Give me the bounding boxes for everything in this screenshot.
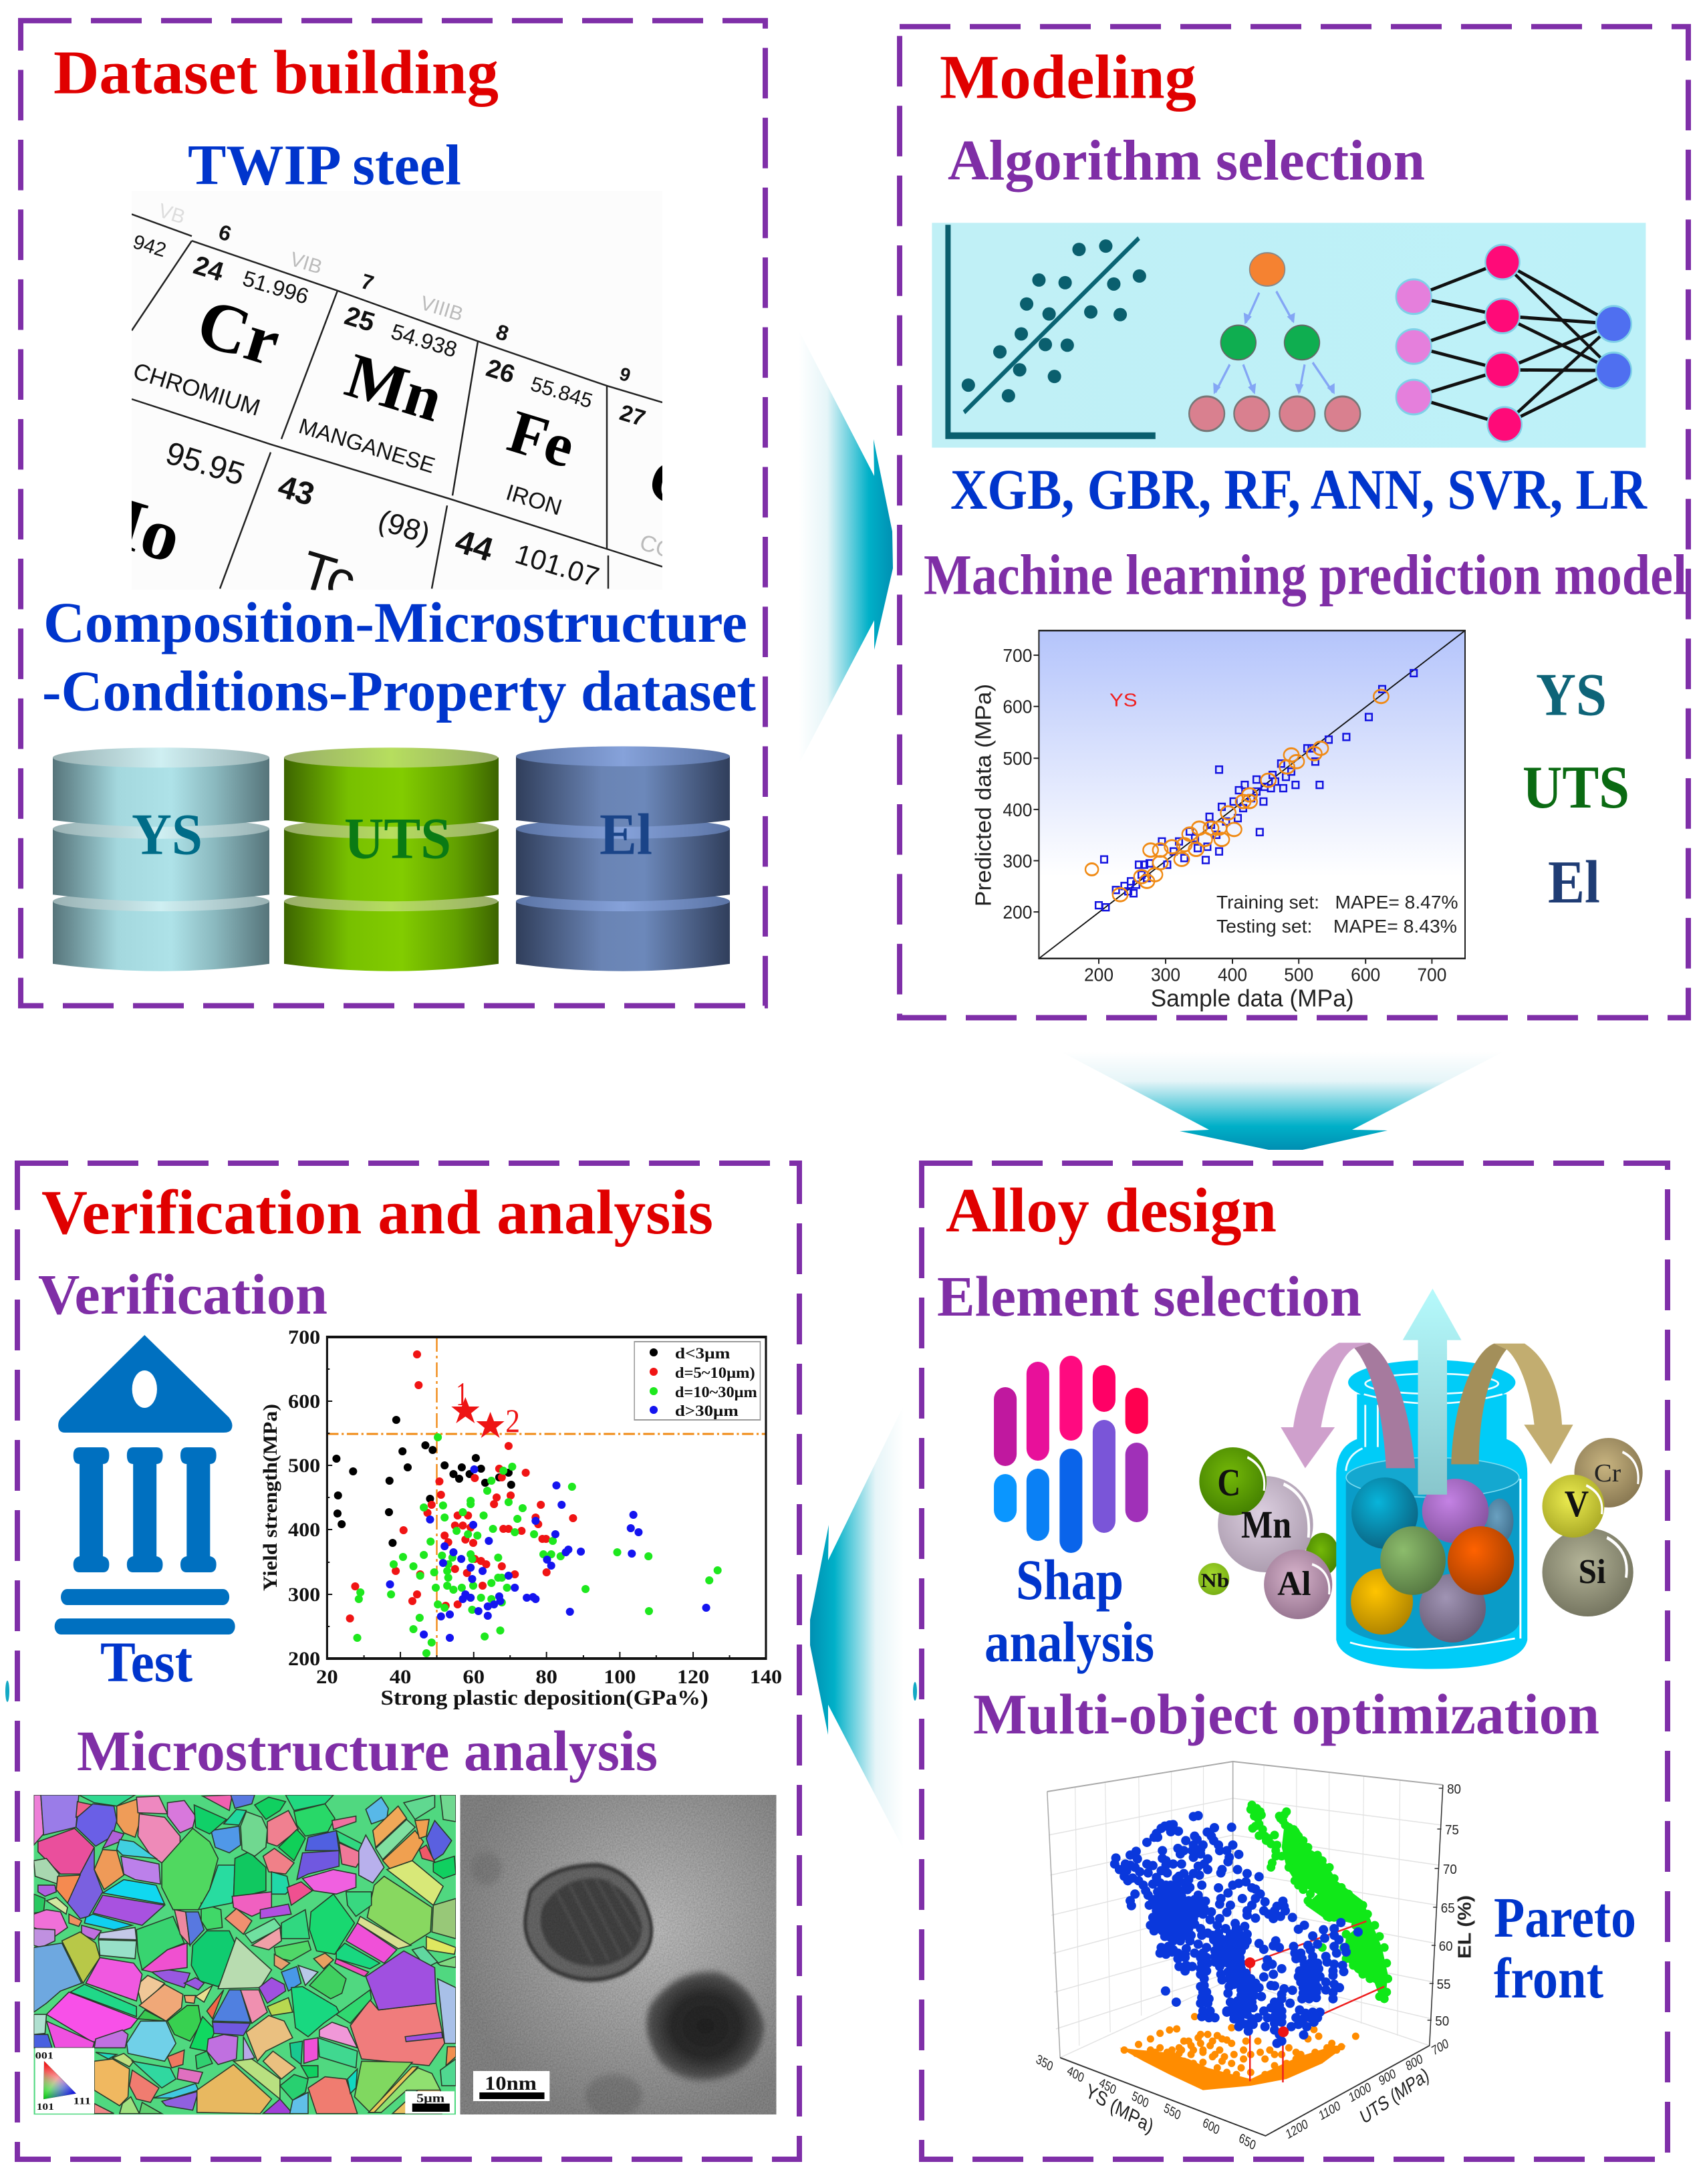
heading: dataset building: Dataset building [53,38,499,107]
chart: 3D Pareto front: 75 [1445,1822,1459,1837]
subheading: element selection: Element selection [937,1264,1361,1328]
chart: predicted vs sample data: 600 [1351,965,1380,985]
label: pareto front: front [1494,1946,1603,2010]
panel frame [17,1163,799,2159]
chart: 3D Pareto front: 350 [1035,2052,1055,2074]
label: shap analysis: analysis [984,1610,1154,1674]
marker: star 1 [451,1397,479,1423]
chart: predicted vs sample data: YS [1109,690,1138,711]
database: YS: YS [132,802,203,867]
illustration: element bottle [1281,1289,1573,1669]
chart: 3D Pareto front [1035,1762,1475,2153]
spheres [1351,1477,1418,1549]
label: shap analysis: Shap [1016,1548,1124,1612]
chart: yield strength vs strong plastic deposition [260,1326,782,1710]
chart: yield strength vs strong plastic deposition: 500 [288,1454,320,1477]
image: periodic table: Mo [65,470,191,578]
text: conditions-property dataset: -Conditions-Property dataset [42,660,756,723]
scale bar: 5 micrometres: 5μm [416,2091,445,2105]
subheading: algorithm selection: Algorithm selection [948,129,1425,193]
chart: predicted vs sample data: 400 [1003,800,1032,820]
chart: predicted vs sample data: 200 [1003,902,1032,923]
icon: linear regression [948,225,1156,436]
panel: alloy design [913,1163,1668,2159]
chart: yield strength vs strong plastic deposition: 20 [316,1665,338,1688]
orange floor projection [1120,2017,1355,2090]
database: UTS [284,747,499,971]
database: El [516,746,730,971]
chart: 3D Pareto front: 600 [1201,2115,1221,2138]
chart: predicted vs sample data [971,630,1465,1011]
text: composition-microstructure: Composition-Microstructure [43,591,747,654]
chart: 3D Pareto front: UTS (MPa) [1357,2063,1432,2129]
database: YS [53,747,269,971]
image: periodic table: VIB [287,248,325,279]
panel: verification and analysis [5,1163,799,2159]
label: YS: YS [1536,660,1607,729]
image: periodic table: 8 [493,320,512,346]
chart: 3D Pareto front: 500 [1130,2088,1150,2111]
image: periodic table: 25 [341,301,378,338]
chart: 3D Pareto front: 650 [1237,2131,1258,2153]
chart: yield strength vs strong plastic deposition: 120 [677,1665,709,1688]
legend: inverse pole figure: 001 [35,2050,53,2061]
illustration: element spheres: C [1217,1462,1240,1504]
icon: test institution [55,1335,235,1634]
chart: yield strength vs strong plastic deposition: 200 [288,1647,320,1670]
chart: predicted vs sample data: 700 [1417,965,1446,985]
icon: decision tree [1189,253,1360,431]
image: periodic table: Cr [188,285,289,381]
image: periodic table: Tc [294,539,363,612]
chart: predicted vs sample data: 300 [1003,851,1032,872]
panel: modeling [900,27,1688,1017]
chart: yield strength vs strong plastic deposition: d<3μm [675,1346,730,1362]
chart: yield strength vs strong plastic deposition: 100 [604,1665,636,1688]
scale bar: 10 nm [473,2071,549,2101]
chart: predicted vs sample data: 500 [1003,749,1032,769]
chart: predicted vs sample data: Sample data (MPa) [1151,985,1354,1011]
image: periodic table: 44 [451,522,498,569]
chart: yield strength vs strong plastic deposition: 600 [288,1390,320,1413]
chart: yield strength vs strong plastic deposition: 1 [456,1375,468,1413]
label: shap analysis [984,1548,1154,1674]
chart: predicted vs sample data: 600 [1003,697,1032,717]
chart: yield strength vs strong plastic deposition: Strong plastic deposition(GPa%) [380,1686,708,1710]
heading: verification and analysis: Verification and analysis [41,1178,713,1247]
image: periodic table: Mn [338,340,451,435]
tick labels: 80 [1447,1782,1461,1796]
chart: 3D Pareto front: 900 [1377,2066,1398,2088]
image: periodic table: 51.996 [240,265,311,309]
marker: star 2 [477,1412,505,1438]
chart: yield strength vs strong plastic deposition: 2 [505,1402,520,1439]
legend: inverse pole figure [35,2048,94,2114]
chart: yield strength vs strong plastic deposition: 300 [288,1583,320,1606]
chart: 3D Pareto front: 700 [1430,2036,1450,2058]
legend: inverse pole figure: 111 [73,2095,91,2106]
red optimal points [1250,1963,1283,2032]
arrow: up through bottle [1403,1289,1462,1495]
image: periodic table: 55.845 [528,372,596,412]
artifact: teal sliver [913,1682,917,1701]
image: periodic table: 6 [216,220,235,246]
chart: 3D Pareto front: 1000 [1347,2080,1373,2105]
illustration: element spheres: Al [1277,1565,1311,1603]
label: test: Test [100,1630,192,1694]
chart: 3D Pareto front: 1200 [1284,2116,1310,2142]
chart: yield strength vs strong plastic deposition: 60 [463,1665,485,1688]
arrow: dataset building to modeling [797,326,893,768]
label: pareto front: Pareto [1494,1885,1636,1949]
panel frame [922,1163,1668,2159]
panel frame [21,21,765,1005]
bottle body [1336,1394,1527,1669]
arrow: alloy design to verification [810,1404,904,1851]
image: periodic table: Fe [501,396,583,481]
artifact: teal sliver [5,1681,9,1702]
arrow: out to left elements [1281,1343,1369,1468]
chart: yield strength vs strong plastic deposition: d>30μm [675,1403,739,1420]
arrow: out to right elements [1494,1344,1573,1464]
image: periodic table: 43 [274,469,318,513]
legend: inverse pole figure: 101 [37,2101,54,2112]
chart: predicted vs sample data: 400 [1218,965,1247,985]
image: periodic table: 27 [617,400,648,431]
chart: 3D Pareto front: 800 [1404,2051,1424,2074]
image: periodic table: 24 [190,251,227,287]
chart: predicted vs sample data: 700 [1003,646,1032,666]
label: UTS: UTS [1523,753,1629,821]
heading: alloy design: Alloy design [946,1176,1277,1245]
red guide lines [1249,1921,1384,2082]
image: periodic table: C [641,445,702,521]
label: pareto front [1494,1885,1636,2010]
image: periodic table: VB [156,200,188,229]
chart: predicted vs sample data: Predicted data (MPa) [971,684,996,906]
panel frame [900,27,1688,1017]
data points [1115,1805,1388,2090]
chart: yield strength vs strong plastic deposition: Yield strength(MPa) [260,1404,281,1591]
image: periodic table: 7 [358,269,377,295]
label: El: El [1548,848,1600,916]
subheading: verification: Verification [38,1262,327,1326]
image: periodic table: MANGANESE [296,413,438,478]
image: periodic table: IRON [503,480,565,521]
subheading: TWIP steel: TWIP steel [188,134,461,197]
chart: 3D Pareto front: 55 [1437,1977,1451,1991]
chart: 3D Pareto front: 450 [1097,2075,1118,2098]
image: EBSD grain map [34,1795,456,2114]
image: periodic table [132,203,662,590]
chart: 3D Pareto front: 60 [1439,1939,1453,1953]
chart: yield strength vs strong plastic deposition: d=10~30μm [675,1384,757,1401]
image: periodic table: CO [637,529,677,564]
chart: 3D Pareto front: 400 [1065,2063,1086,2086]
heading: modeling: Modeling [940,42,1196,112]
chart: yield strength vs strong plastic deposition: 80 [535,1665,557,1688]
chart: yield strength vs strong plastic deposition: 700 [288,1326,320,1348]
panel: dataset building [21,21,765,1005]
chart: 3D Pareto front: 70 [1443,1862,1457,1876]
illustration: element spheres: Si [1579,1553,1606,1591]
chart: 3D Pareto front: 1100 [1317,2098,1342,2123]
image: periodic table: (98) [374,504,434,550]
chart: predicted vs sample data: 200 [1084,965,1113,985]
chart: yield strength vs strong plastic deposition: d=5~10μm) [675,1365,755,1382]
image: periodic table: 95.95 [162,435,249,493]
database: El: El [600,802,652,867]
image: periodic table: 54.938 [388,319,460,362]
subheading: microstructure analysis: Microstructure analysis [77,1719,658,1783]
green Pareto points [1251,1805,1388,2000]
subheading: multi-object optimization: Multi-object optimization [973,1682,1599,1746]
illustration: element spheres [1198,1438,1643,1619]
chart: 3D Pareto front: EL (%) [1454,1895,1475,1959]
illustration: element spheres: Mn [1241,1504,1291,1546]
image: periodic table: CHROMIUM [130,358,263,421]
chart: 3D Pareto front: 50 [1435,2014,1449,2028]
illustration: element spheres: V [1565,1483,1589,1524]
scale bar: 10 nm: 10nm [485,2072,537,2094]
chart: yield strength vs strong plastic deposition: 140 [750,1665,782,1688]
scale bar: 5 micrometres [405,2091,454,2114]
chart: predicted vs sample data: 300 [1151,965,1180,985]
chart: predicted vs sample data: Testing set: MAPE= 8.43% [1216,917,1457,937]
image: periodic table: 9 [617,363,633,386]
illustration: element spheres: Cr [1594,1460,1621,1487]
chart: yield strength vs strong plastic deposition: 40 [390,1665,411,1688]
chart: predicted vs sample data: 500 [1284,965,1313,985]
panel: algorithm icons [932,223,1646,448]
chart: predicted vs sample data: Training set: MAPE= 8.47% [1216,892,1458,913]
image: periodic table: 101.07 [511,538,603,593]
icon: neural network [1396,245,1631,442]
chart: 3D Pareto front: 65 [1441,1901,1455,1915]
icon: SHAP bars [994,1356,1148,1553]
illustration: element spheres: Nb [1201,1569,1229,1592]
database: UTS: UTS [344,806,451,871]
arrow: modeling to alloy design [1061,1052,1504,1150]
chart: 3D Pareto front: 550 [1162,2100,1182,2123]
image: periodic table: 26 [483,354,518,389]
image: TEM precipitates [461,1795,777,2117]
chart box [1047,1762,1443,2136]
chart: yield strength vs strong plastic deposition: 400 [288,1518,320,1541]
blue points [1115,1816,1358,2044]
image: periodic table: VIIIB [418,292,466,326]
chart: 3D Pareto front: YS (MPa) [1083,2079,1156,2138]
image: periodic table: 942 [130,231,168,261]
